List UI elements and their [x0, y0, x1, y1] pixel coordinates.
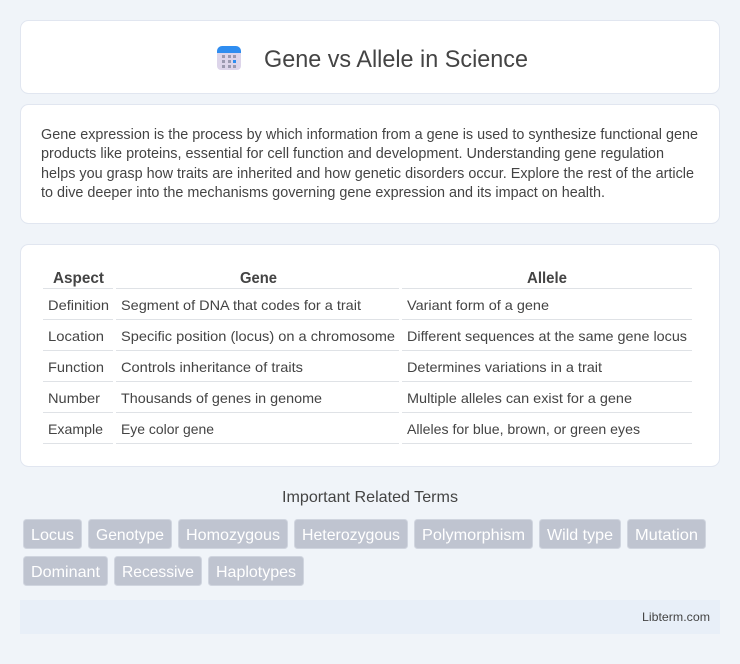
panel: intro paragraph: to dive deeper into the mechanisms governing gene expression and its impact on health.: [41, 185, 605, 201]
related term tags: Heterozygous: [302, 527, 400, 544]
related term tags: Haplotypes: [216, 564, 296, 581]
row: location: Specific position (locus) on a chromosome: [121, 328, 395, 344]
icon: calendar grid: [217, 46, 241, 70]
row: example: Eye color gene: [121, 421, 214, 437]
row: definition: [48, 297, 549, 313]
table header row: Aspect: [53, 270, 105, 287]
row: number: [48, 390, 632, 406]
panel: intro paragraph: products like proteins, essential for cell function and development. Understanding gene regulation: [41, 146, 664, 162]
row: definition: Variant form of a gene: [407, 297, 549, 313]
related term tags: Homozygous: [186, 527, 280, 544]
row: example: Alleles for blue, brown, or green eyes: [407, 421, 640, 437]
row: location: Different sequences at the same gene locus: [407, 328, 687, 344]
related term tags: Locus: [31, 527, 74, 544]
related term tags: Recessive: [122, 564, 194, 581]
footer: [20, 600, 720, 634]
title: Gene vs Allele in Science: [264, 46, 528, 73]
row: number: Thousands of genes in genome: [121, 390, 322, 406]
heading: related terms: Important Related Terms: [282, 489, 458, 506]
table header row: Gene: [240, 270, 277, 287]
row: example: [48, 421, 640, 437]
row: number: Number: [48, 390, 100, 406]
panel: comparison table: [20, 244, 720, 466]
related term tags: Polymorphism: [422, 527, 525, 544]
row: function: Function: [48, 359, 104, 375]
related term tags: [24, 520, 706, 586]
related term tags: Wild type: [547, 527, 613, 544]
row: example: Example: [48, 421, 103, 437]
panel: intro paragraph: helps you grasp how traits are inherited and how genetic disorders occur. Explore the rest of the article: [41, 166, 694, 182]
row: function: [48, 359, 602, 375]
row: location: Location: [48, 328, 104, 344]
related term tags: Mutation: [635, 527, 698, 544]
panel: intro paragraph: Gene expression is the process by which information from a gene is used to synthesize functional gene: [41, 127, 698, 143]
related term tags: Genotype: [96, 527, 164, 544]
panel: intro paragraph: [20, 104, 720, 224]
row: number: Multiple alleles can exist for a gene: [407, 390, 632, 406]
related term tags: Dominant: [31, 564, 101, 581]
header panel: [20, 20, 720, 94]
footer: Libterm.com: [642, 610, 710, 624]
row: function: Controls inheritance of traits: [121, 359, 303, 375]
row: location: [48, 328, 687, 344]
table header row: Allele: [527, 270, 567, 287]
row: function: Determines variations in a trait: [407, 359, 602, 375]
row: definition: Definition: [48, 297, 109, 313]
table header row: [53, 270, 567, 287]
row: definition: Segment of DNA that codes for a trait: [121, 297, 361, 313]
